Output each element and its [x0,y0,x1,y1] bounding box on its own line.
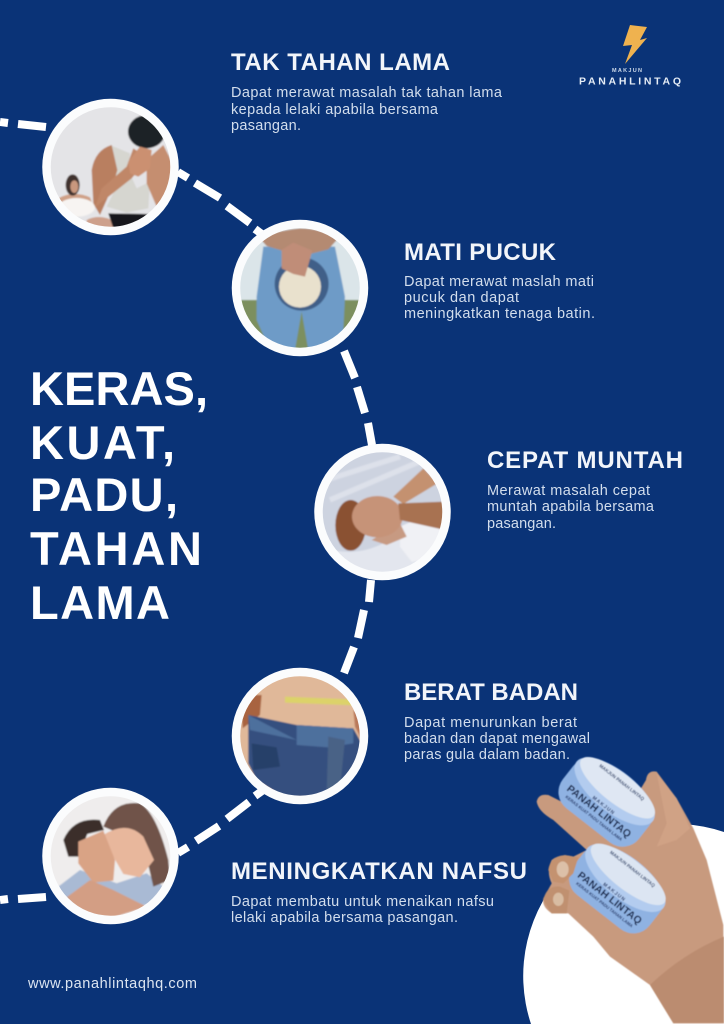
benefit: meningkatkan nafsu [231,858,527,926]
jar: lower: PANAH LINTAQ [575,870,643,927]
jar: upper: MAKJUN PANAH LINTAQ [598,763,646,802]
headline: KUAT, [30,416,175,469]
photo: man holding head, partner behind [43,100,180,237]
benefit: cepat muntah [487,447,683,532]
fingers over jars [543,855,578,913]
benefit: meningkatkan nafsu: MENINGKATKAN NAFSU [231,858,527,885]
benefit: mati pucuk: Dapat merawat maslah mati [404,274,594,290]
icon: lightning bolt [623,25,647,64]
benefit: meningkatkan nafsu: lelaki apabila bersama pasangan. [231,910,458,926]
jar: lower: MAKJUN PANAH LINTAQ [609,850,656,888]
jar: upper: MAKJUN [591,795,616,817]
benefit: mati pucuk: MATI PUCUK [404,239,557,266]
logo: MAKJUN [612,68,642,74]
benefit: berat badan: Dapat menurunkan berat [404,715,577,731]
photo: loose jeans and measuring tape [232,667,368,803]
benefit: cepat muntah: pasangan. [487,516,556,532]
benefit: berat badan: BERAT BADAN [404,679,578,706]
dashed arc connector [0,122,372,900]
headline: TAHAN [30,522,202,575]
benefit: mati pucuk: pucuk dan dapat [404,290,519,306]
photo: person covering face in bed [315,445,452,582]
benefit: tak tahan lama: pasangan. [231,118,301,134]
jar: lower [561,832,676,942]
headline: LAMA [30,576,170,629]
benefit: meningkatkan nafsu: Dapat membatu untuk menaikan nafsu [231,894,494,910]
logo: PANAHLINTAQ [579,76,681,88]
headline [30,362,208,629]
headline: PADU, [30,468,178,521]
jar: lower: MAKJUN [601,882,627,903]
logo [579,25,681,88]
benefit: berat badan: paras gula dalam badan. [404,747,570,763]
white corner circle [523,824,724,1024]
benefit: berat badan: badan dan dapat mengawal [404,731,590,747]
website: www.panahlintaqhq.com [27,976,197,992]
jar: upper [550,745,665,855]
photo: jeans and hat [233,222,367,355]
headline: KERAS, [30,362,208,415]
benefit: mati pucuk: meningkatkan tenaga batin. [404,306,595,322]
benefit: berat badan [404,679,590,763]
benefit: cepat muntah: CEPAT MUNTAH [487,447,683,474]
jar: upper: KERAS KUAT PADU TAHAN LAMA [564,794,624,842]
photo: smiling couple [43,788,180,925]
jar: upper: PANAH LINTAQ [564,784,633,840]
hand holding two jars [537,745,724,1023]
benefit: tak tahan lama: kepada lelaki apabila bersama [231,102,439,118]
benefit: tak tahan lama: TAK TAHAN LAMA [231,49,450,76]
jar: lower: KERAS KUAT PADU TAHAN LAMA [575,881,635,929]
benefit: cepat muntah: muntah apabila bersama [487,499,655,515]
benefit: tak tahan lama [231,49,503,134]
benefit: mati pucuk [404,239,595,322]
benefit: cepat muntah: Merawat masalah cepat [487,483,650,499]
hand [537,771,724,1023]
benefit: tak tahan lama: Dapat merawat masalah tak tahan lama [231,85,503,101]
